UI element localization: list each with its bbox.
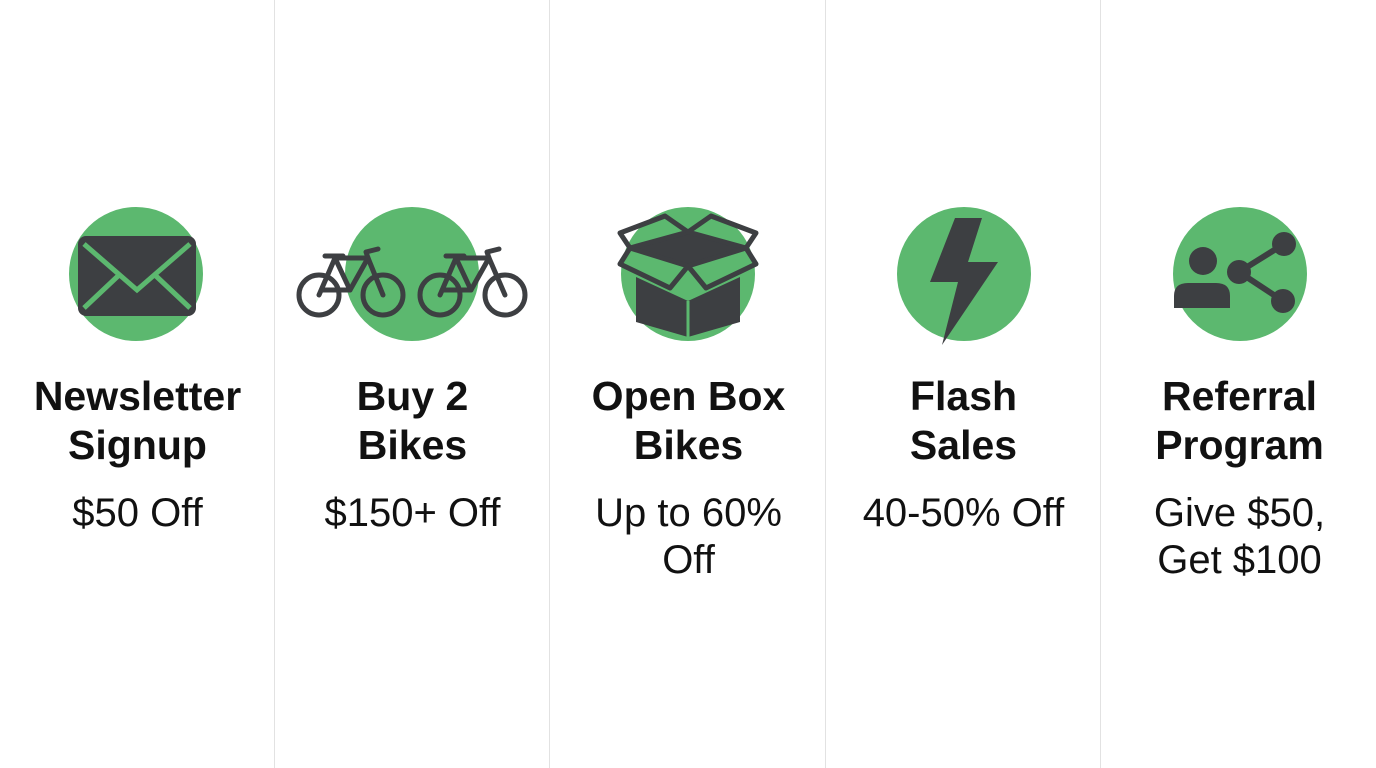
heading: newsletter (34, 373, 241, 468)
heading: open box: Bikes (634, 422, 743, 468)
text: give get (1154, 491, 1325, 582)
text: $50 off: $50 Off (72, 491, 203, 535)
text: $150+ off: $150+ Off (324, 491, 501, 535)
text: 40-50%: 40-50% Off (863, 491, 1064, 535)
icon: two bikes (299, 207, 525, 341)
heading: flash sales (910, 373, 1017, 468)
text: give get: Get $100 (1157, 538, 1322, 582)
heading: referral: Referral (1162, 373, 1317, 419)
heading: flash sales: Sales (910, 422, 1017, 468)
text: up to 60%: Up to 60% (595, 491, 782, 535)
panel: buy 2 bikes (324, 373, 501, 535)
heading: newsletter: Newsletter (34, 373, 241, 419)
panel: newsletter (34, 373, 241, 535)
heading: buy 2: Buy 2 (357, 373, 468, 419)
heading: newsletter: Signup (68, 422, 207, 468)
heading: open box (592, 373, 785, 468)
heading: referral (1155, 373, 1324, 468)
text: up to 60%: Off (662, 538, 715, 582)
text: up to 60% (595, 491, 782, 582)
icon: envelope (69, 207, 203, 341)
heading: flash sales: Flash (910, 373, 1017, 419)
heading: open box: Open Box (592, 373, 785, 419)
panel: open box (592, 373, 785, 582)
icon: open box (620, 207, 756, 341)
heading: buy 2: Bikes (358, 422, 467, 468)
text: give get: Give $50, (1154, 491, 1325, 535)
icon: referral share (1173, 207, 1307, 341)
panel: flash sales (863, 373, 1064, 535)
panel: referral (1154, 373, 1325, 582)
icon: lightning (897, 207, 1031, 345)
heading: referral: Program (1155, 422, 1324, 468)
heading: buy 2 (357, 373, 468, 468)
